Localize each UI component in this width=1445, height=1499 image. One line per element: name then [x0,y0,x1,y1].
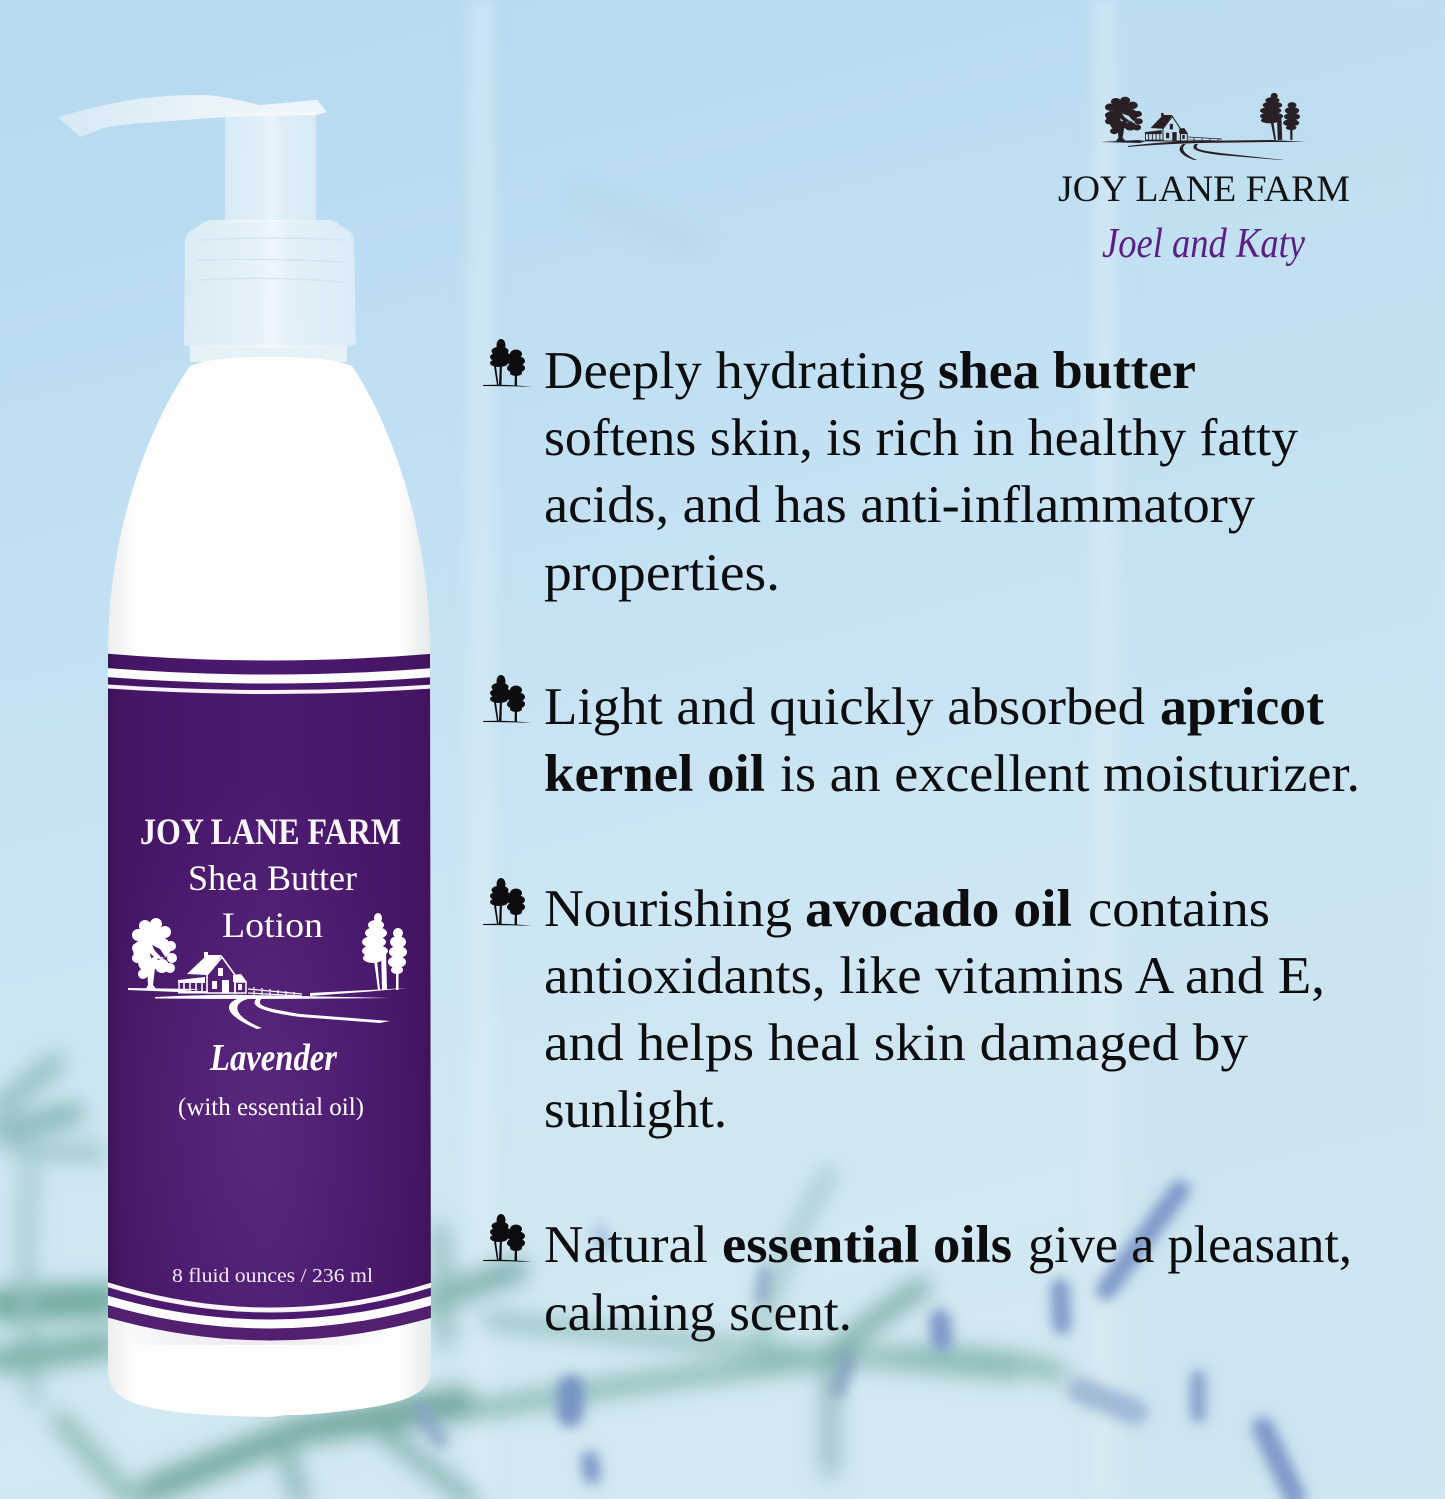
label brand name: JOY LANE FARM [140,812,401,853]
benefit 4 text: essential oils [722,1216,1012,1274]
bottle [58,95,440,1417]
icon: tree bullet [483,1214,532,1262]
benefit 4 text [544,1216,1352,1342]
benefit 1 text: acids, and has anti-inflammatory [544,476,1256,534]
logo wordmark: JOY LANE FARM [1058,169,1350,210]
background: blurred lavender stems and leaves [0,1063,1060,1499]
pump actuator [58,95,327,222]
product label [100,653,440,1345]
benefit 3 text: contains [1088,880,1270,938]
benefit 2: apricot kernel oil [483,675,1360,803]
pump collar [184,220,356,362]
benefit 1 text: softens skin, is rich in healthy fatty [544,409,1298,467]
brand logo [1058,93,1350,267]
benefit 1 text: Deeply hydrating [544,342,925,400]
benefit 3 text: avocado oil [805,880,1072,938]
benefit 3 text: and helps heal skin damaged by [544,1014,1249,1072]
benefit 2 text: is an excellent moisturizer. [780,745,1360,803]
benefit 3 text: Nourishing [544,880,792,938]
bottle body [108,357,431,1417]
benefit 2 text: Light and quickly absorbed [544,678,1145,736]
label product name: Shea Butter [188,858,357,898]
label subtext: (with essential oil) [178,1094,364,1121]
label volume: 8 fluid ounces / 236 ml [172,1265,373,1287]
benefit 1 text [544,342,1298,602]
benefit 4 text: Natural [544,1216,708,1274]
benefit 3 text [544,880,1325,1139]
benefit 4: essential oils [483,1214,1352,1342]
benefit 3: avocado oil [483,878,1325,1139]
benefit 4 text: calming scent. [544,1284,852,1342]
benefit 1 text: properties. [544,544,780,602]
label product name [188,858,357,945]
icon: tree bullet [483,675,532,723]
logo signature: Joel and Katy [1102,221,1305,267]
label product name: Lotion [222,905,323,945]
background: blurred lavender flowers [420,1190,1295,1497]
icon: tree bullet [483,339,532,387]
benefit 3 text: antioxidants, like vitamins A and E, [544,947,1325,1005]
logo illustration [1100,93,1306,160]
benefit 3 text: sunlight. [544,1081,727,1139]
benefit 1 text: shea butter [938,342,1196,400]
label scent name: Lavender [209,1037,338,1079]
benefit 2 text: apricot [1160,678,1324,736]
icon: tree bullet [483,878,532,926]
benefit 2 text [544,678,1360,803]
label farm illustration [128,913,408,1029]
benefit 1: shea butter [483,339,1298,602]
benefit 4 text: give a pleasant, [1028,1216,1352,1274]
benefit 2 text: kernel oil [544,745,765,803]
